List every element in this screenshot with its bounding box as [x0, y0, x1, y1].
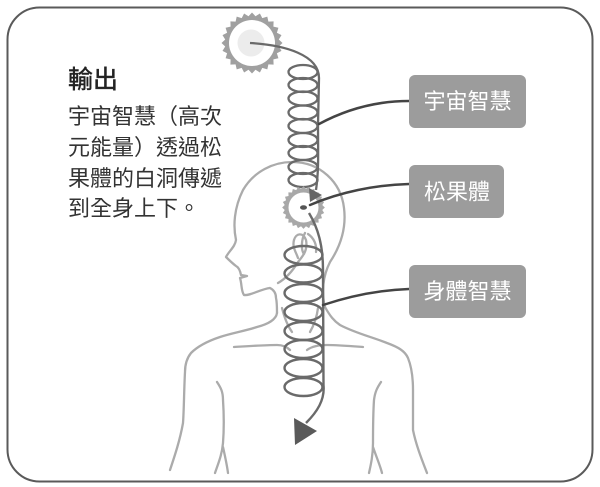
upper arrowhead: [309, 188, 322, 202]
label: pineal gland: [409, 165, 504, 218]
cosmic wisdom sun icon: [222, 12, 282, 74]
label: body wisdom: 身體智慧: [423, 279, 512, 304]
description text: 元能量）透過松: [68, 135, 222, 160]
head and face: [226, 162, 345, 313]
collar bones: [234, 345, 290, 350]
lower arrowhead: [294, 418, 317, 445]
right armpit: [369, 382, 382, 473]
description text: 果體的白洞傳遞: [68, 166, 222, 191]
right shoulder and arm: [325, 307, 427, 473]
lower spiral coil: [284, 213, 324, 423]
ear: [278, 233, 306, 283]
heading: 輸出: [68, 66, 118, 94]
upper spiral coil: [250, 43, 319, 190]
label: cosmic wisdom: 宇宙智慧: [423, 89, 512, 114]
description text: 宇宙智慧（高次: [68, 104, 222, 129]
connector lines: [310, 101, 409, 305]
label: body wisdom: [409, 265, 526, 318]
description text: [68, 104, 222, 221]
label: pineal gland: 松果體: [424, 180, 490, 204]
pineal gland icon: [282, 186, 325, 229]
human body outline: [170, 162, 427, 473]
neck lines: [282, 308, 318, 332]
description text: 到全身上下。: [68, 196, 200, 221]
label: cosmic wisdom: [409, 75, 526, 128]
left shoulder and arm: [170, 313, 277, 470]
left armpit: [215, 382, 228, 473]
